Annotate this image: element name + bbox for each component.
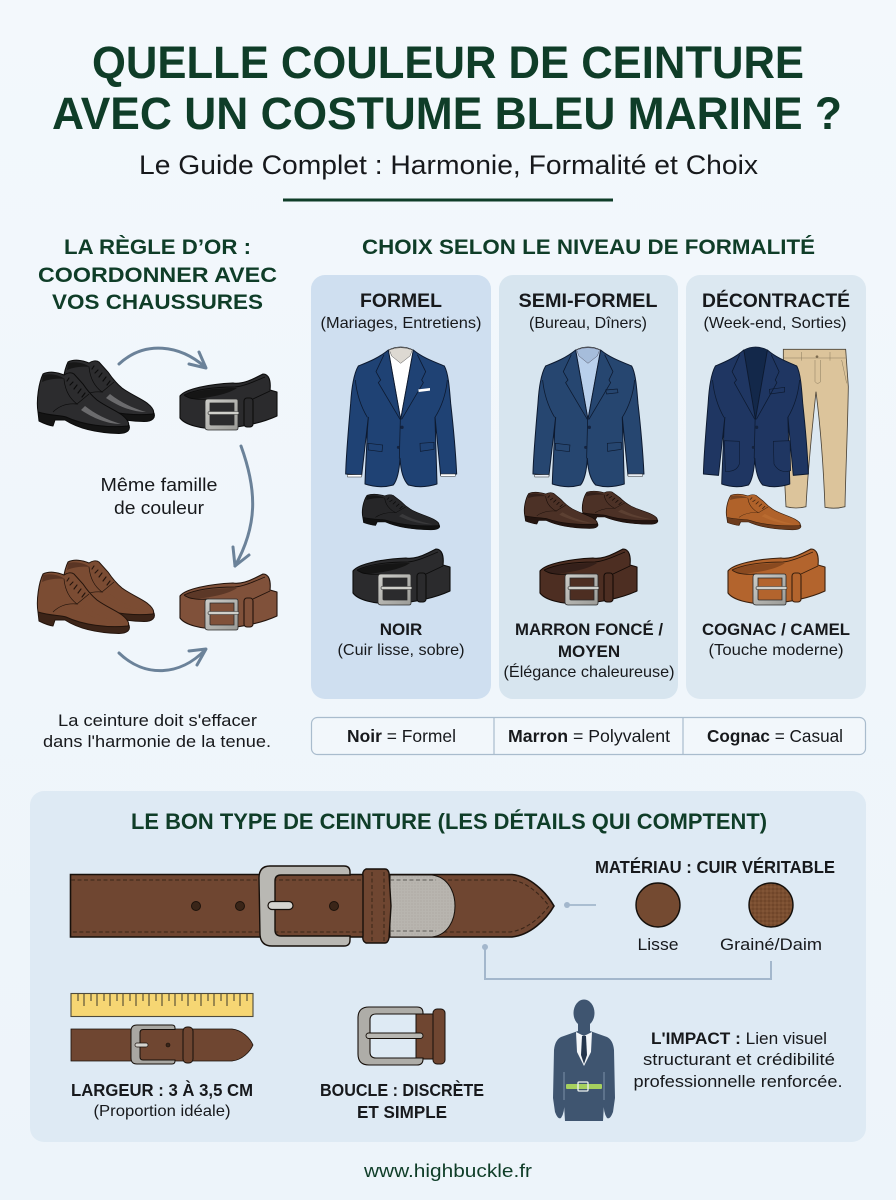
connector: tip to material [564, 902, 596, 908]
label: formal [320, 291, 482, 332]
icon: brown belt [180, 574, 277, 630]
label: smooth: Lisse [638, 935, 678, 954]
icon: cognac belt [728, 549, 825, 605]
text: impact: L'IMPACT : Lien visuel [651, 1029, 827, 1048]
icon: buckle [358, 1007, 445, 1065]
material [595, 856, 835, 954]
title [52, 37, 842, 139]
width [71, 994, 253, 1120]
panel: golden rule [37, 236, 277, 751]
icon: dark brown belt [540, 549, 637, 605]
arrow: brown shoes to belt [119, 649, 206, 671]
icon: dark brown shoes [524, 491, 658, 528]
icon: black belt [353, 549, 450, 605]
icon: black belt [180, 374, 277, 430]
label: semi-formal: (Bureau, Dîners) [529, 315, 647, 332]
label: dark brown [504, 620, 674, 681]
text: same colour family [100, 475, 218, 518]
header [52, 37, 842, 202]
summary: brown: Marron = Polyvalent [508, 726, 670, 746]
label: formal: (Mariages, Entretiens) [320, 315, 482, 332]
label: width: (Proportion idéale) [94, 1103, 230, 1120]
heading: golden rule: VOS CHAUSSURES [52, 291, 263, 314]
impact [553, 1000, 842, 1121]
icon: narrow belt [71, 1025, 253, 1064]
swatch: smooth [636, 883, 680, 927]
suit: navy with white shirt [346, 347, 457, 487]
text: impact [634, 1029, 842, 1091]
arrow: black belt to brown belt [233, 446, 253, 566]
text: impact: professionnelle renforcée. [634, 1072, 842, 1091]
label: dark brown: MARRON FONCÉ / [515, 620, 663, 639]
icon: brown shoes [37, 560, 154, 634]
arrow: shoes to belt [119, 348, 206, 368]
subtitle: Le Guide Complet : Harmonie, Formalité et Choix [139, 150, 759, 180]
text: belt note: dans l'harmonie de la tenue. [43, 732, 271, 751]
label: casual: (Week-end, Sorties) [704, 315, 846, 332]
footer url: www.highbuckle.fr [363, 1160, 532, 1181]
heading: material: MATÉRIAU : CUIR VÉRITABLE [595, 856, 835, 877]
label: black: NOIR [380, 620, 422, 639]
summary: black: Noir = Formel [347, 726, 456, 746]
text: belt note: La ceinture doit s'effacer [58, 711, 257, 730]
label: formal: FORMEL [360, 291, 442, 312]
label: casual: DÉCONTRACTÉ [702, 290, 850, 312]
summary bar [312, 718, 866, 754]
label: buckle: BOUCLE : DISCRÈTE [320, 1079, 484, 1100]
label: width [71, 1079, 253, 1120]
heading: formality: CHOIX SELON LE NIVEAU DE FORMALITÉ [362, 236, 815, 259]
label: cognac: COGNAC / CAMEL [702, 620, 850, 639]
text: same colour family: Même famille [100, 475, 218, 495]
outfit: blazer and chinos [703, 347, 848, 508]
label: buckle: ET SIMPLE [357, 1102, 447, 1122]
label: black [338, 620, 464, 659]
label: black: (Cuir lisse, sobre) [338, 642, 464, 659]
swatch: grained [749, 883, 793, 927]
icon: black shoe [362, 494, 440, 530]
panel: belt details [30, 791, 866, 1142]
text: impact: structurant et crédibilité [643, 1050, 835, 1069]
label: width: LARGEUR : 3 À 3,5 CM [71, 1079, 253, 1100]
panel: casual [686, 275, 866, 699]
icon: man silhouette [553, 1000, 615, 1121]
buckle [320, 1007, 484, 1122]
suit: navy with blue shirt [533, 347, 644, 487]
belt: annotated [70, 866, 554, 946]
title: AVEC UN COSTUME BLEU MARINE ? [52, 88, 842, 139]
label: semi-formal: SEMI-FORMEL [518, 291, 658, 312]
label: dark brown: (Élégance chaleureuse) [504, 662, 674, 681]
label: dark brown: MOYEN [558, 642, 620, 661]
icon: black shoes [37, 360, 154, 434]
summary: cognac: Cognac = Casual [707, 726, 843, 746]
connector: patch to grain [482, 944, 771, 979]
panel: formal [311, 275, 491, 699]
label: grained: Grainé/Daim [720, 935, 822, 954]
label: semi-formal [518, 291, 658, 332]
label: casual [702, 290, 850, 332]
icon: ruler [71, 994, 253, 1016]
heading: golden rule [38, 236, 277, 314]
heading: golden rule: LA RÈGLE D’OR : [64, 236, 251, 259]
text: same colour family: de couleur [114, 498, 204, 518]
label: cognac [702, 620, 850, 659]
icon: cognac shoe [726, 494, 801, 530]
label: buckle [320, 1079, 484, 1122]
heading: belt details: LE BON TYPE DE CEINTURE (LES DÉTAILS QUI COMPTENT) [131, 809, 767, 834]
panel: semi-formal [499, 275, 678, 699]
title: QUELLE COULEUR DE CEINTURE [92, 37, 804, 88]
heading: golden rule: COORDONNER AVEC [38, 264, 277, 287]
label: cognac: (Touche moderne) [708, 642, 844, 659]
text: belt note [43, 711, 271, 751]
